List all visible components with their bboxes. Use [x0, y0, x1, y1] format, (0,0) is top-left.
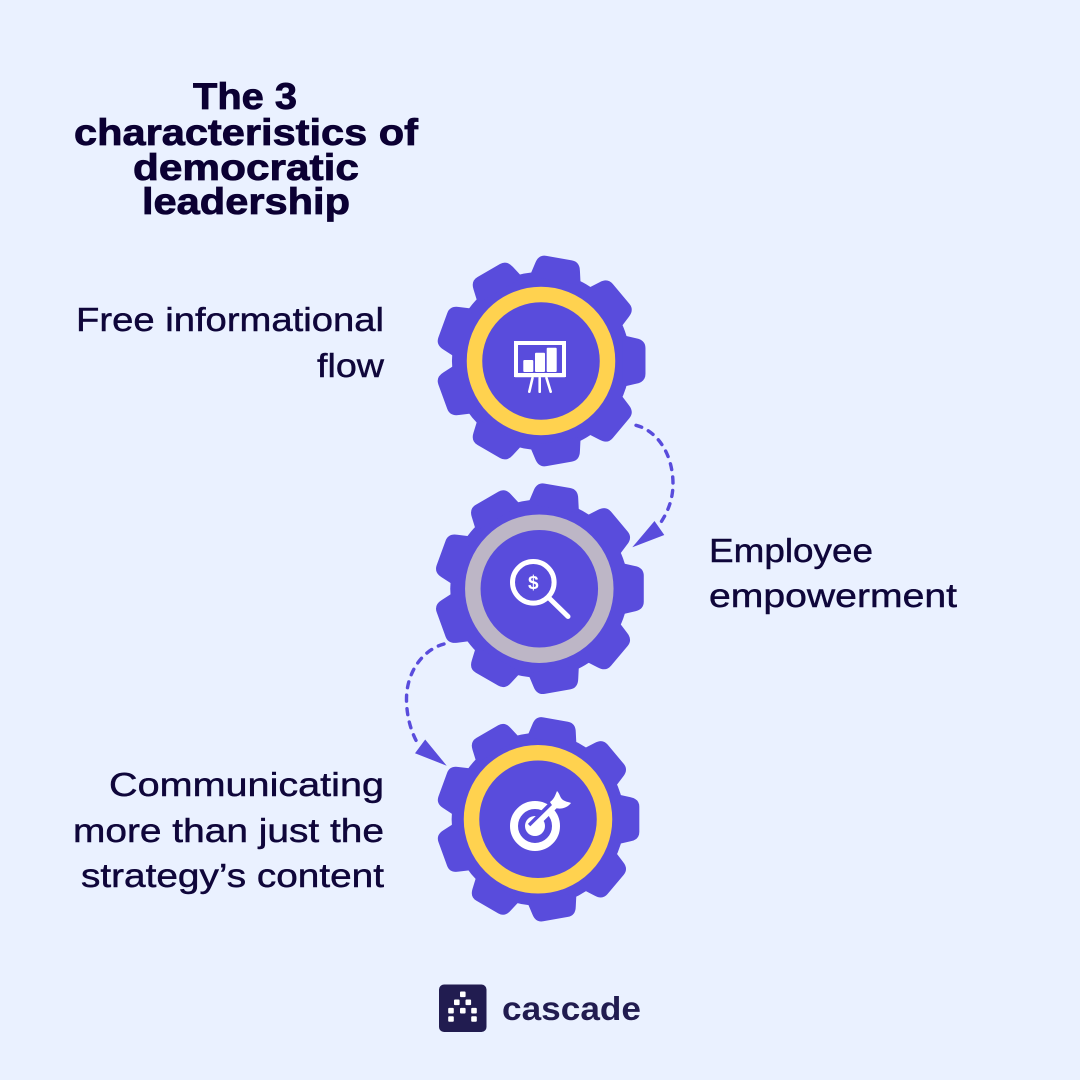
title: characteristics of	[74, 112, 419, 153]
label: free informational flow: Free informational	[76, 301, 384, 338]
label: employee empowerment: empowerment	[709, 577, 957, 614]
icon: cascade mark	[439, 984, 486, 1032]
icon: magnifier with dollar: $	[528, 573, 539, 594]
title: democratic	[133, 147, 359, 188]
label: employee empowerment: Employee	[709, 532, 873, 569]
label: communicating more than just the strategy's content: more than just the	[73, 812, 384, 849]
title: leadership	[142, 181, 350, 222]
wordmark: cascade	[502, 990, 641, 1027]
dashed arrow: gear 1 to gear 2	[632, 425, 673, 547]
label: communicating more than just the strategy's content: strategy’s content	[81, 857, 384, 894]
icon: target and dart	[514, 791, 571, 847]
label: communicating more than just the strategy's content: Communicating	[109, 766, 384, 803]
gear 2 with grey ring and magnifier icon	[432, 481, 644, 696]
gear 3 with yellow ring and target icon	[434, 715, 639, 923]
label: free informational flow	[76, 301, 384, 384]
label: free informational flow: flow	[317, 347, 384, 384]
gear 1 with yellow ring and presentation icon	[434, 254, 645, 468]
logo: cascade	[439, 984, 641, 1032]
title	[74, 76, 419, 222]
icon: magnifier with dollar	[512, 562, 568, 616]
label: employee empowerment	[709, 532, 957, 614]
icon: presentation board	[514, 343, 566, 392]
label: communicating more than just the strategy's content	[73, 766, 384, 894]
title: The 3	[193, 76, 297, 117]
dashed arrow: gear 2 to gear 3	[406, 644, 447, 766]
